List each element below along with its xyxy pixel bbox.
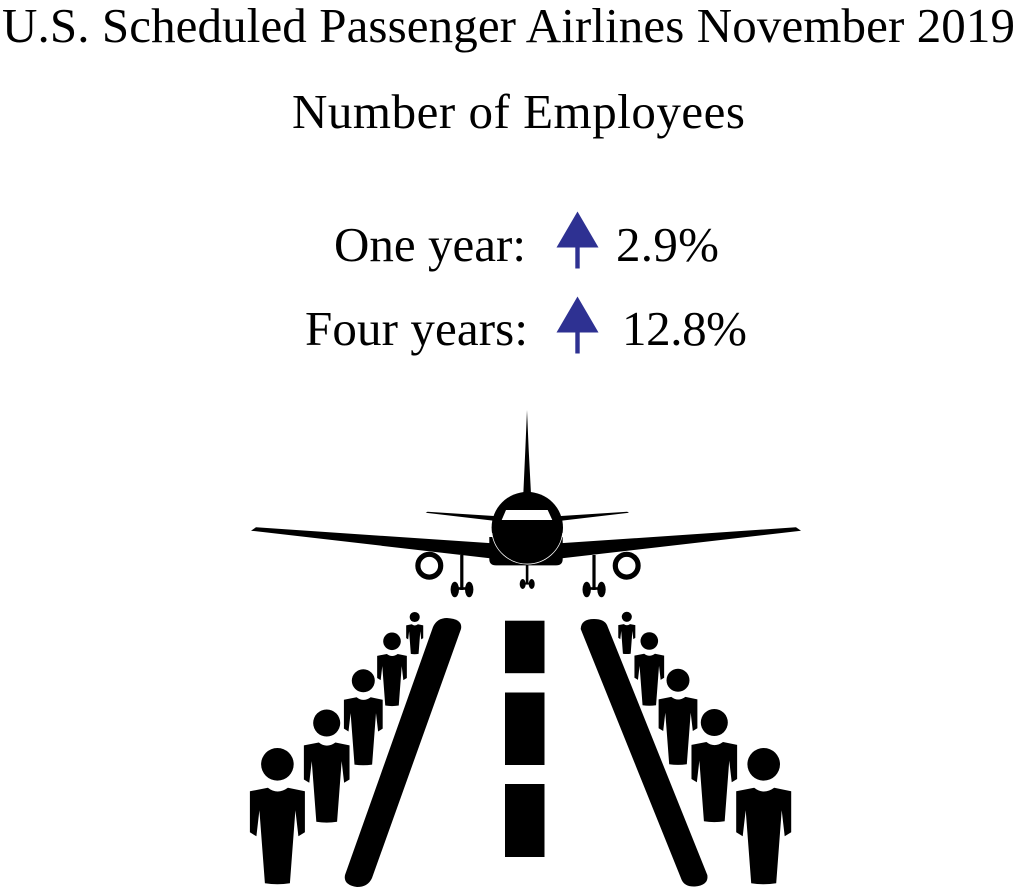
subtitle: Number of Employees (292, 84, 745, 139)
right row of people (618, 612, 791, 884)
person icon left 3 (344, 669, 383, 765)
icon: airplane front view (251, 410, 801, 597)
stat row: one year (334, 212, 719, 272)
stat row: four years (305, 296, 747, 356)
runway center dash 3 (505, 784, 544, 857)
fuselage highlight (492, 533, 563, 564)
person icon left 5 (406, 612, 423, 654)
tail fin (523, 410, 531, 494)
label: one year: One year: (334, 217, 526, 272)
person icon left 1 (250, 748, 305, 884)
right wing (560, 527, 801, 558)
runway right edge (581, 619, 707, 887)
value: four years: 12.8% (622, 301, 747, 356)
person icon right 2 (691, 709, 737, 822)
runway (345, 618, 707, 887)
right landing gear (582, 555, 606, 597)
left wing (251, 527, 492, 558)
person icon right 4 (634, 632, 664, 706)
left landing gear (451, 555, 473, 597)
person icon right 1 (736, 748, 791, 884)
fuselage nose (492, 492, 563, 563)
right engine (615, 554, 638, 577)
icon: up arrow, four years (556, 296, 598, 354)
runway center dash 1 (505, 621, 544, 673)
person icon right 3 (659, 669, 697, 765)
runway left edge (345, 618, 461, 887)
left engine (418, 554, 441, 577)
icon: up arrow, one year (556, 212, 598, 268)
value: one year: 2.9% (616, 217, 719, 272)
person icon left 2 (304, 709, 350, 823)
runway center dash 2 (505, 692, 544, 765)
label: four years: Four years: (305, 301, 528, 356)
right stabilizer (561, 512, 629, 521)
left stabilizer (426, 512, 494, 521)
person icon left 4 (377, 632, 407, 706)
cockpit window (502, 510, 552, 520)
fuselage base (489, 537, 563, 565)
nose landing gear (520, 565, 535, 589)
left row of people (250, 612, 423, 884)
person icon right 5 (618, 612, 635, 654)
